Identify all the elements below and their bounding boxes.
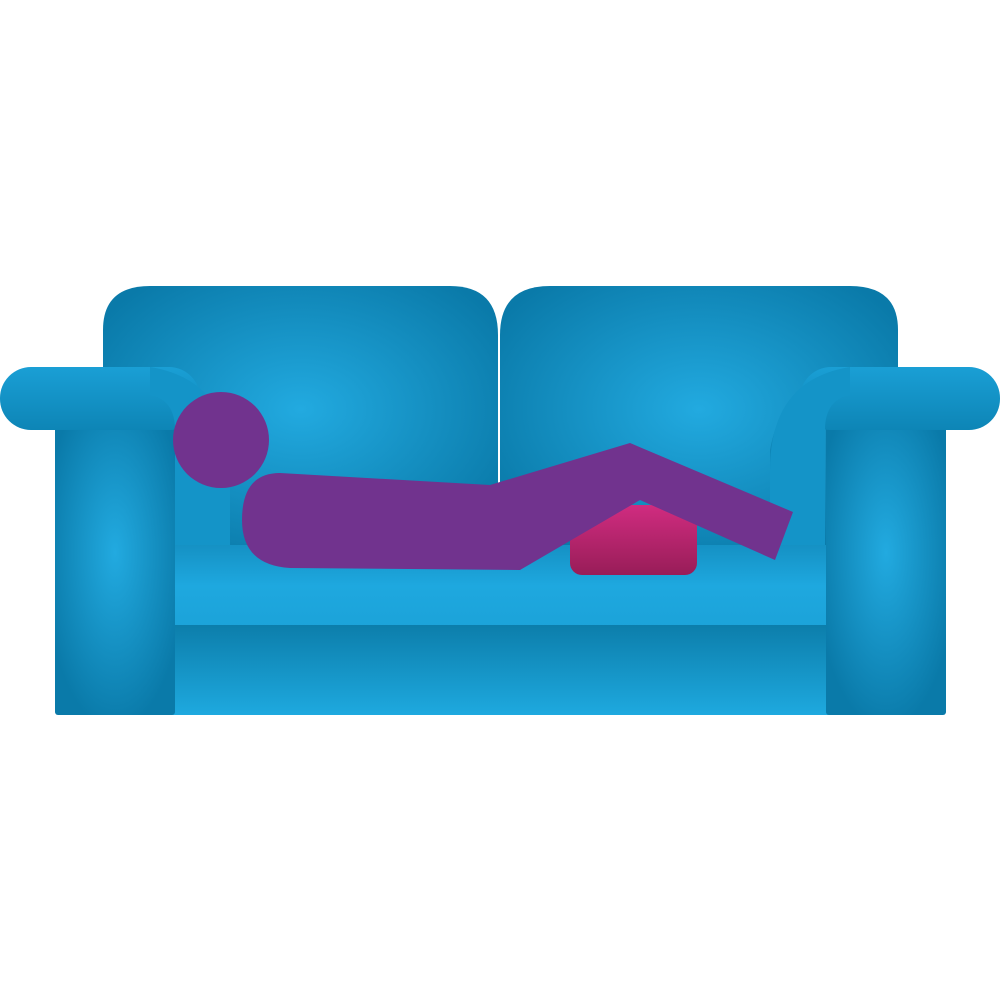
seat front xyxy=(170,625,830,715)
back cushion right xyxy=(500,286,898,560)
pillow xyxy=(570,505,697,575)
person xyxy=(173,392,793,570)
left arm xyxy=(0,367,230,715)
body and legs xyxy=(242,443,793,570)
seat xyxy=(170,545,830,627)
head xyxy=(173,392,269,488)
sofa xyxy=(0,286,1000,715)
right arm xyxy=(770,367,1000,715)
back cushion left xyxy=(103,286,498,560)
